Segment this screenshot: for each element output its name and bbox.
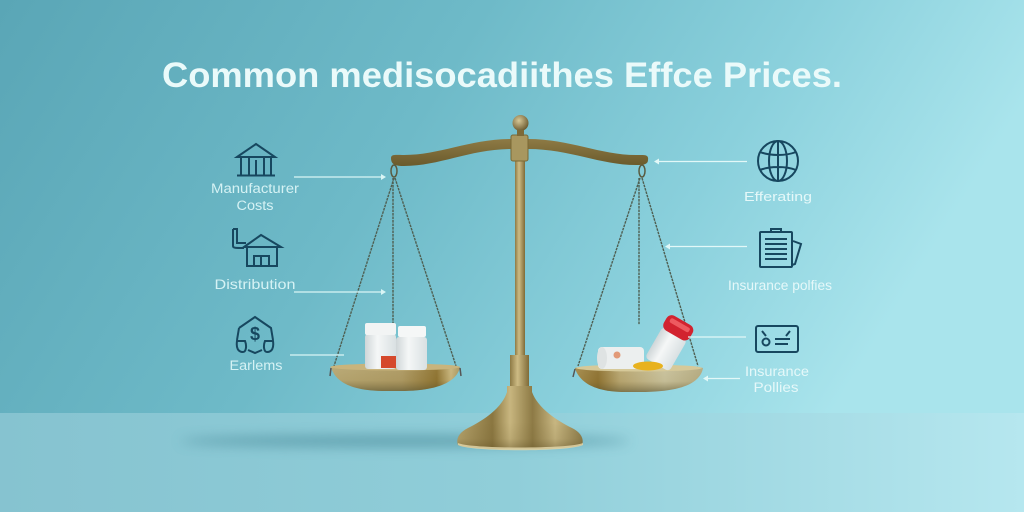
scale knob xyxy=(512,115,528,131)
background floor xyxy=(0,413,1024,512)
scale collar xyxy=(510,355,529,387)
icon: globe xyxy=(758,141,798,181)
right column: insurance policies xyxy=(728,229,832,293)
scale bell base xyxy=(457,386,583,450)
pill: yellow xyxy=(633,362,663,370)
bottle: back left xyxy=(365,323,396,369)
label: distribution: Distribution xyxy=(214,276,296,292)
right column: insurance card xyxy=(745,326,809,395)
icon: shield with dollar and hands: $ xyxy=(250,324,260,344)
label: insurance policies two lines: Insurance xyxy=(745,364,809,379)
arrow: earnings to pan xyxy=(290,354,344,356)
arrow: card to bottle xyxy=(688,336,746,338)
scale beam xyxy=(391,139,648,166)
scale pole xyxy=(515,150,525,356)
label: manufacturer costs: Manufacturer xyxy=(211,181,300,196)
scale foot shading xyxy=(457,422,583,450)
arrow: entry one to beam xyxy=(654,158,747,164)
icon: card xyxy=(756,326,798,352)
left column: manufacturer costs xyxy=(211,144,300,213)
right column: entry one xyxy=(744,141,812,204)
right column: insurance card: Pollies xyxy=(754,380,799,395)
right bottles xyxy=(597,313,695,372)
label: insurance policies: Insurance polfies xyxy=(728,278,832,293)
left pan xyxy=(330,364,461,391)
balance scale xyxy=(330,115,703,450)
scale foot rim xyxy=(458,443,583,450)
left column: earnings xyxy=(230,317,283,373)
icon: clipboard xyxy=(760,229,801,267)
floor shadow xyxy=(180,435,630,447)
label: earnings: Earlems xyxy=(230,358,283,373)
arrow: distribution to chain xyxy=(294,289,386,295)
icon: factory building xyxy=(237,144,275,176)
bottle: lying on side xyxy=(597,347,644,369)
scale pivot xyxy=(511,135,528,161)
arrow: insurance policies to chain xyxy=(665,244,747,250)
scale right chains xyxy=(578,178,698,366)
title: Common medisocadiithes Effce Prices. xyxy=(162,55,842,95)
arrow: manufacturer to beam xyxy=(294,174,386,180)
scale left chains xyxy=(334,178,456,366)
left column: manufacturer costs: Costs xyxy=(236,198,274,213)
right pan xyxy=(573,364,703,392)
left bottles xyxy=(365,323,427,370)
left column: distribution xyxy=(214,229,296,292)
bottle: front right xyxy=(396,326,427,370)
scale hooks xyxy=(391,165,645,177)
icon: warehouse xyxy=(233,229,281,266)
arrow: label to right pan xyxy=(703,376,740,382)
label: enterating: Efferating xyxy=(744,189,812,204)
bottle: upright tilted with red cap xyxy=(644,313,695,372)
